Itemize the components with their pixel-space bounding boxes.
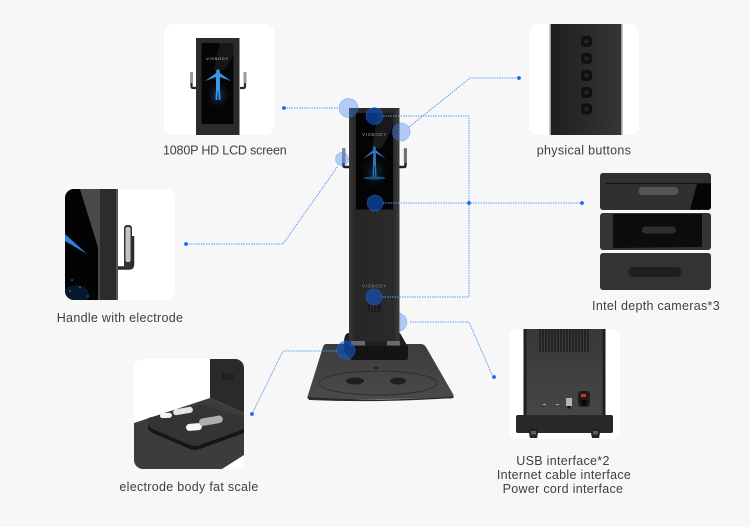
connector end dots bbox=[184, 76, 584, 416]
rear of kiosk bbox=[516, 329, 613, 438]
button column bbox=[550, 24, 622, 135]
left handle bbox=[342, 148, 349, 167]
label: electrode body fat scale bbox=[119, 480, 259, 494]
scale close-up bbox=[134, 359, 244, 469]
panel: LCD screen bbox=[163, 24, 287, 158]
panel: handle with electrode bbox=[57, 189, 183, 325]
scale plinth front bbox=[344, 341, 408, 360]
camera strip 2 bbox=[600, 213, 711, 250]
panel: body fat scale bbox=[119, 359, 259, 494]
label: physical buttons bbox=[537, 144, 631, 158]
speaker vents bbox=[369, 304, 380, 312]
lower logo: VISBODY bbox=[362, 284, 387, 288]
label: 1080P HD LCD screen bbox=[163, 144, 287, 158]
label: interfaces: USB interface*2 bbox=[516, 454, 610, 468]
floor mat bbox=[307, 344, 454, 401]
label: interfaces bbox=[497, 454, 631, 496]
label: Handle with electrode bbox=[57, 311, 183, 325]
panel: rear interfaces bbox=[497, 329, 631, 496]
camera strip 1 bbox=[600, 173, 711, 210]
camera strip 3 bbox=[600, 253, 711, 290]
label: interfaces: Internet cable interface bbox=[497, 468, 631, 482]
tower bbox=[349, 108, 400, 341]
hotspots bbox=[336, 98, 410, 359]
right handle bbox=[399, 148, 407, 167]
panel: physical buttons bbox=[538, 24, 630, 157]
product: main kiosk bbox=[307, 108, 454, 401]
connector lines bbox=[186, 78, 582, 414]
touch screen: VISBODY bbox=[362, 132, 387, 137]
label: interfaces: Power cord interface bbox=[503, 482, 623, 496]
touch screen bbox=[356, 113, 393, 210]
scale plinth back bbox=[344, 333, 408, 350]
handle image bbox=[63, 189, 132, 305]
label: Intel depth cameras*3 bbox=[592, 299, 720, 313]
panel: depth cameras bbox=[592, 173, 720, 313]
kiosk front image: VISBODY bbox=[206, 56, 229, 61]
